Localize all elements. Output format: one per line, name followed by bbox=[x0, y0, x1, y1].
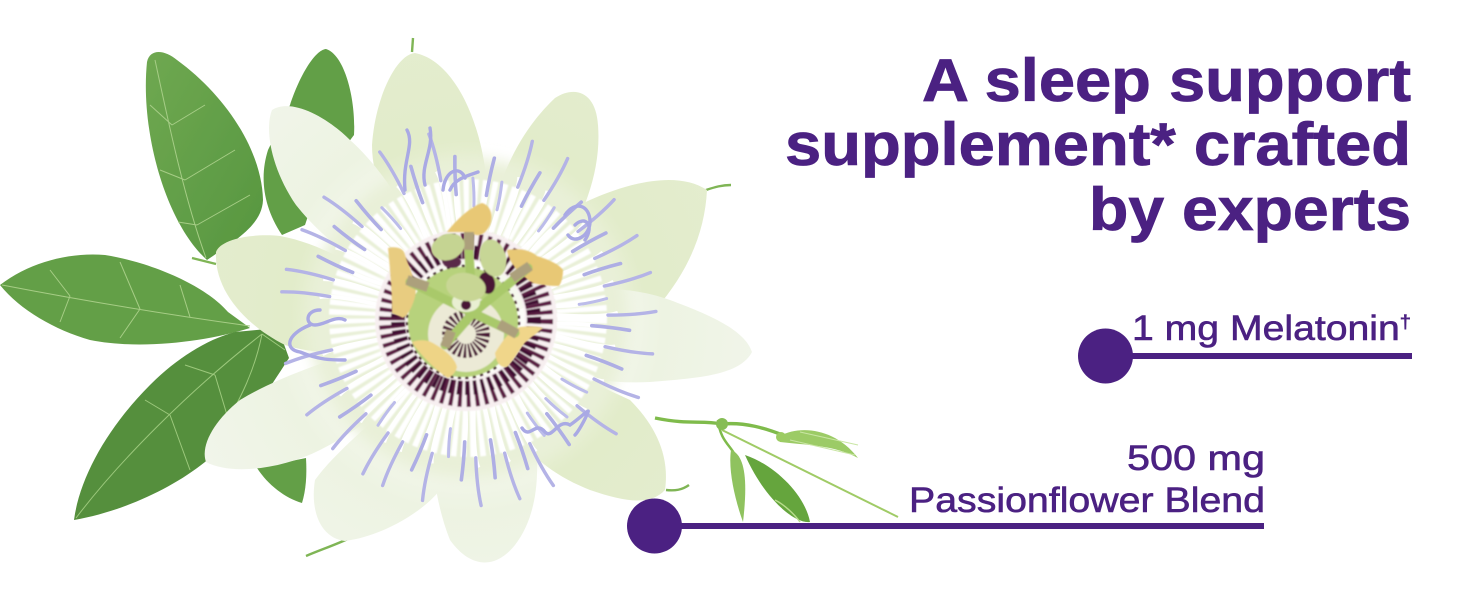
anther: right bbox=[507, 249, 563, 286]
callout: melatonin: † bbox=[1400, 312, 1411, 332]
leaf: left bbox=[0, 254, 250, 344]
callout: passionflower blend bbox=[627, 439, 1265, 554]
corona: maroon spokes bbox=[391, 245, 541, 395]
small stems bbox=[192, 38, 731, 556]
style arms bbox=[410, 240, 528, 345]
front petal: left bbox=[216, 235, 430, 352]
front petal: lower left bbox=[205, 330, 430, 469]
curly lilac filaments bbox=[290, 128, 590, 435]
stigma heads bbox=[428, 229, 468, 265]
leaf: top back bbox=[264, 49, 354, 235]
back petal: upper right bbox=[480, 92, 598, 320]
anther: top bbox=[447, 203, 492, 235]
leaf: small bottom bbox=[257, 458, 306, 503]
green ring bbox=[408, 267, 518, 377]
corona: white filaments bbox=[282, 134, 656, 506]
callout: melatonin bbox=[1078, 309, 1412, 384]
dotted ring bbox=[407, 266, 519, 378]
corona: lilac-tipped filaments bbox=[282, 134, 656, 506]
front petal: bottom bbox=[431, 350, 537, 562]
heading bbox=[785, 47, 1411, 243]
anther: left bbox=[388, 247, 416, 318]
front petal: right bbox=[500, 289, 752, 382]
leaf: lower left bbox=[74, 328, 289, 520]
heading: by experts bbox=[1089, 176, 1411, 243]
leaves bbox=[0, 38, 731, 556]
front petal: bottom left bbox=[314, 360, 449, 541]
leaf: upper left bbox=[146, 52, 263, 260]
flower bbox=[205, 53, 752, 562]
callout: passionflower blend: Passionflower Blend bbox=[909, 481, 1265, 520]
anther: lower right bbox=[495, 326, 543, 367]
speckled tips bbox=[407, 232, 530, 347]
front petal: upper left bbox=[269, 106, 450, 310]
callout: passionflower blend: 500 mg bbox=[1127, 439, 1265, 478]
anther: lower left bbox=[412, 340, 457, 378]
back petal: top bbox=[372, 53, 486, 320]
heading: A sleep support bbox=[922, 47, 1411, 114]
back petal: lower right bbox=[500, 340, 666, 501]
back petal: right bbox=[500, 180, 707, 320]
heading: supplement* crafted bbox=[785, 111, 1411, 178]
central disc and stamens bbox=[388, 203, 563, 378]
sprig: stem, bud and leaves bbox=[655, 418, 898, 522]
ovary bbox=[452, 292, 480, 312]
callout: melatonin: 1 mg Melatonin bbox=[1132, 309, 1371, 348]
